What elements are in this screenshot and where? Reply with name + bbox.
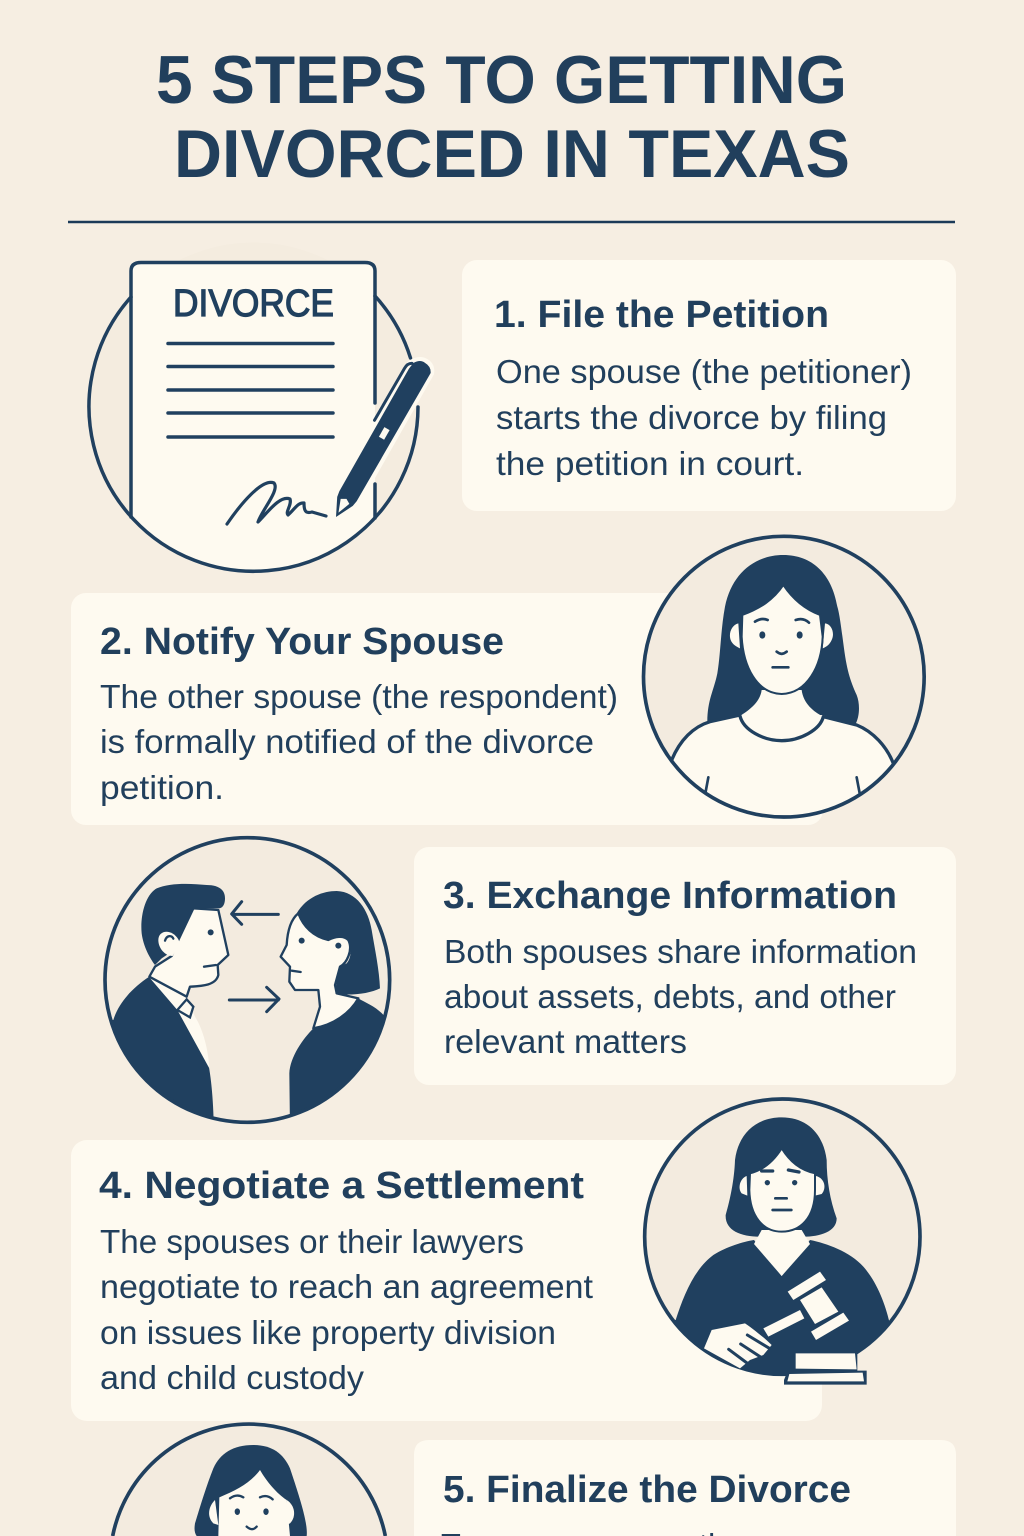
text: step 3 description: about assets, debts, and other [444,978,896,1015]
heading: step 3: 3. Exchange Information [443,875,897,917]
heading: step 5: 5. Finalize the Divorce [443,1469,851,1511]
gavel [763,1272,849,1340]
text: step 1 description: the petition in court. [496,445,804,482]
title: DIVORCED IN TEXAS [174,116,850,192]
panel: step 3 [414,847,956,1085]
text: step 1 description [496,353,912,482]
heading: step 2: 2. Notify Your Spouse [100,621,504,663]
text: step 1 description: One spouse (the petitioner) [496,353,912,390]
text: step 3 description: relevant matters [444,1023,687,1060]
text: step 4 description: on issues like property division [100,1314,556,1351]
text: step 4 description: The spouses or their lawyers [100,1223,524,1260]
arrow: left [232,902,278,924]
icon: divorce document and pen [89,242,436,572]
hand [704,1323,772,1368]
text: step 4 description: negotiate to reach an agreement [100,1268,593,1305]
heading: step 1: 1. File the Petition [494,294,829,336]
icon: spouses exchanging information [100,838,400,1130]
title [156,42,850,192]
text: step 4 description: and child custody [100,1359,365,1396]
text: step 1 description: starts the divorce by filing [496,399,887,436]
icon: divorce document and pen: DIVORCE [173,283,334,325]
panel: step 5 [414,1440,956,1536]
text: step 2 description: petition. [100,769,224,806]
man [112,884,230,1116]
icon: worried woman [643,536,924,830]
sound block [784,1352,867,1385]
panel: step 1 [462,260,956,511]
woman [280,891,384,1114]
icon: woman with gavel [643,1099,930,1390]
signature [227,482,326,524]
icon: smiling woman [113,1424,385,1536]
panel: step 4 [71,1140,822,1421]
text: step 2 description [100,678,618,806]
text: step 2 description: The other spouse (the respondent) [100,678,618,715]
text: step 3 description [444,933,917,1060]
pen [322,354,436,526]
heading: step 4: 4. Negotiate a Settlement [99,1165,584,1207]
text: step 2 description: is formally notified of the divorce [100,723,594,760]
text: step 3 description: Both spouses share information [444,933,917,970]
title: 5 STEPS TO GETTING [156,42,847,118]
arrow: right [229,987,279,1012]
panel: step 2 [71,593,823,825]
text: step 4 description [100,1223,593,1396]
